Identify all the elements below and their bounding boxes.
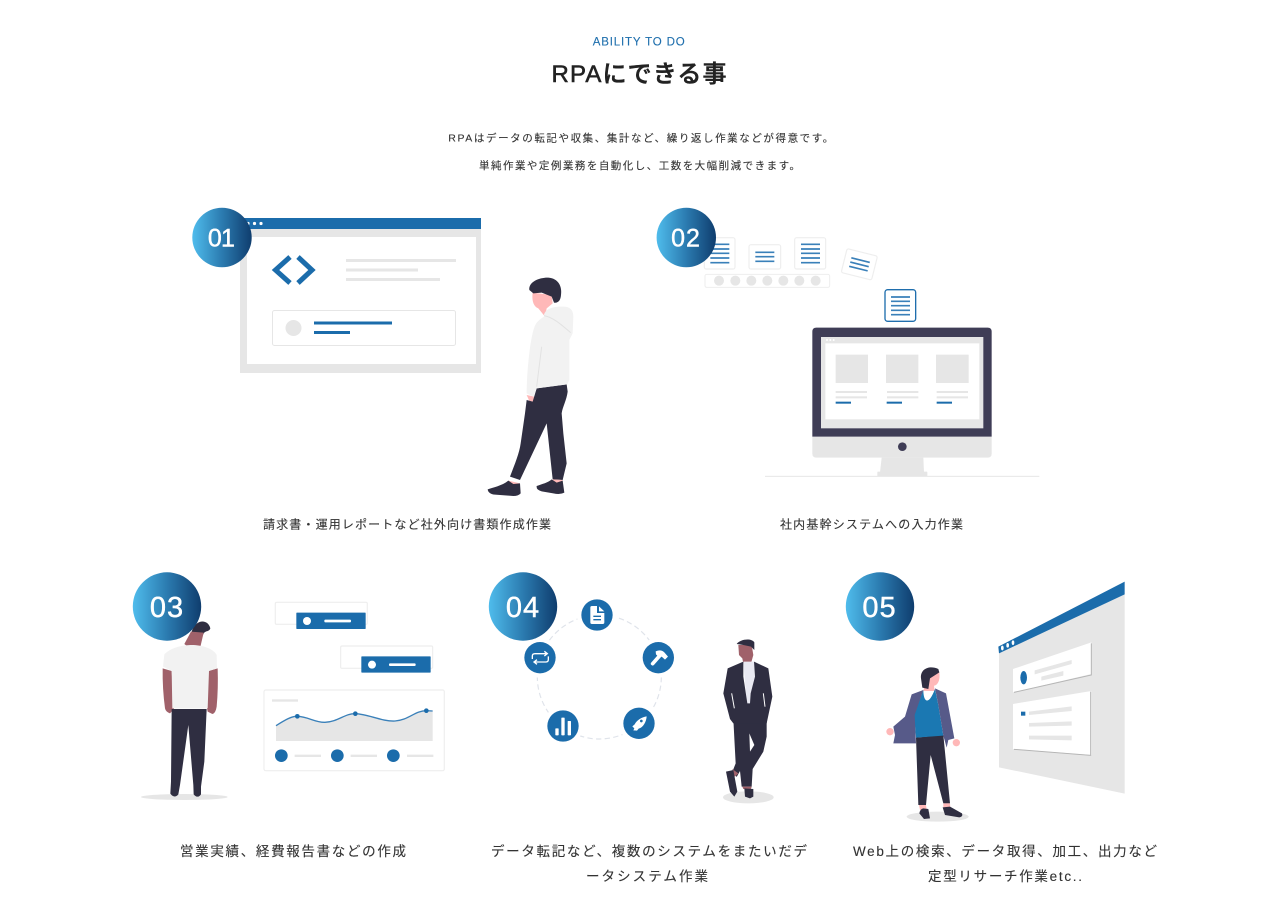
- panel 05: perspective window and person: [886, 582, 1125, 822]
- person in suit: [723, 639, 774, 803]
- person in white t-shirt: [141, 621, 228, 800]
- intro text: RPAはデータの転記や収集、集計など、繰り返し作業などが得意です。: [448, 132, 833, 144]
- caption 03: 営業実績、経費報告書などの作成: [180, 844, 406, 859]
- badge 05: 05: [862, 592, 897, 624]
- dashed ring: [537, 615, 661, 739]
- icon: hammer: [638, 638, 678, 678]
- caption 02: 社内基幹システムへの入力作業: [780, 516, 963, 532]
- icon: rocket: [619, 703, 659, 743]
- intro text: 単純作業や定例業務を自動化し、工数を大幅削減できます。: [479, 159, 800, 172]
- panel 03: dashboard cards and person: [141, 602, 444, 800]
- icon: bar chart: [543, 706, 583, 746]
- caption 01: 請求書・運用レポートなど社外向け書類作成作業: [263, 516, 551, 532]
- caption 04: データ転記など、複数のシステムをまたいだデ: [491, 843, 808, 859]
- person with hoodie: [488, 278, 573, 496]
- woman in jacket: [886, 667, 969, 822]
- notification card 1: [275, 602, 367, 629]
- perspective browser window: [998, 582, 1125, 794]
- caption 05: 定型リサーチ作業etc..: [928, 869, 1082, 884]
- badge 03: 03: [150, 592, 184, 624]
- badge 04: 04: [506, 592, 540, 624]
- line chart card: [264, 690, 444, 771]
- icon: repeat arrows: [520, 638, 560, 678]
- browser window: [240, 218, 481, 373]
- badge 02: [657, 208, 716, 267]
- title: RPAにできる事: [552, 61, 726, 88]
- icon: document: [577, 595, 617, 635]
- badge 02: 02: [671, 224, 701, 252]
- conveyor with documents: [704, 238, 878, 287]
- notification card 2: [341, 646, 433, 673]
- panel 02: documents flowing into desktop monitor: [704, 238, 1039, 477]
- panel 04: process cycle and person in suit: [520, 595, 774, 803]
- badge 01: 01: [208, 224, 234, 252]
- caption 04: ータシステム作業: [586, 869, 708, 884]
- badge 05: [846, 572, 914, 641]
- eyebrow: ABILITY TO DO: ABILITY TO DO: [593, 36, 685, 48]
- caption 05: [853, 843, 1158, 884]
- panel 01: browser illustration and person: [240, 218, 573, 496]
- caption 04: [491, 843, 808, 884]
- intro text: [448, 132, 833, 172]
- badge 04: [489, 572, 557, 641]
- desktop monitor: [765, 328, 1039, 477]
- highlighted document: [885, 290, 916, 321]
- caption 05: Web上の検索、データ取得、加工、出力など: [853, 843, 1158, 859]
- badge 03: [133, 572, 201, 641]
- badge 01: [192, 208, 252, 267]
